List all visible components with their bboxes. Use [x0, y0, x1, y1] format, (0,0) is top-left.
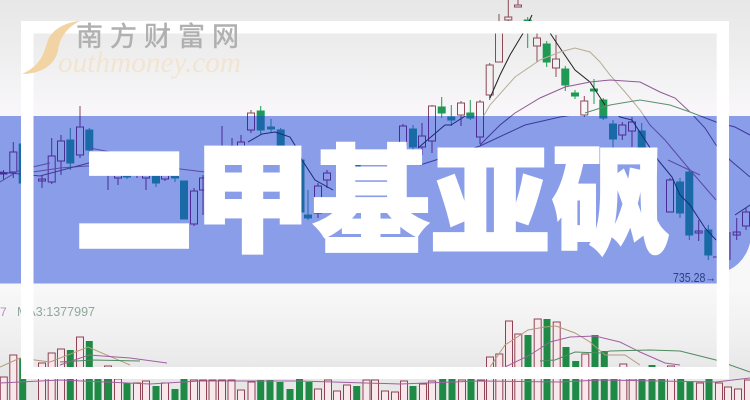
blue title band — [0, 116, 750, 284]
logo chinese name: 南方财富网 — [76, 22, 246, 52]
candlestick chart above band — [0, 0, 750, 260]
title: 基 — [312, 138, 430, 270]
volume bars: green — [19, 319, 712, 400]
indicator label fragment: 7 — [0, 305, 7, 319]
indicator label: MA3: MA3:1377997 — [17, 305, 95, 319]
title: 二 — [75, 130, 193, 271]
logo swoosh — [22, 21, 80, 74]
title: 甲 — [193, 136, 311, 268]
logo: southmoney — [22, 21, 246, 79]
title — [75, 130, 669, 271]
title: 亚 — [431, 138, 550, 270]
title: 砜 — [551, 138, 669, 270]
logo domain: outhmoney.com — [58, 46, 241, 79]
volume moving average lines — [0, 326, 750, 384]
volume bars: hollow — [0, 319, 750, 400]
price label: 735.28: 735.28→ — [673, 271, 716, 285]
candlestick chart inside band — [0, 116, 750, 260]
